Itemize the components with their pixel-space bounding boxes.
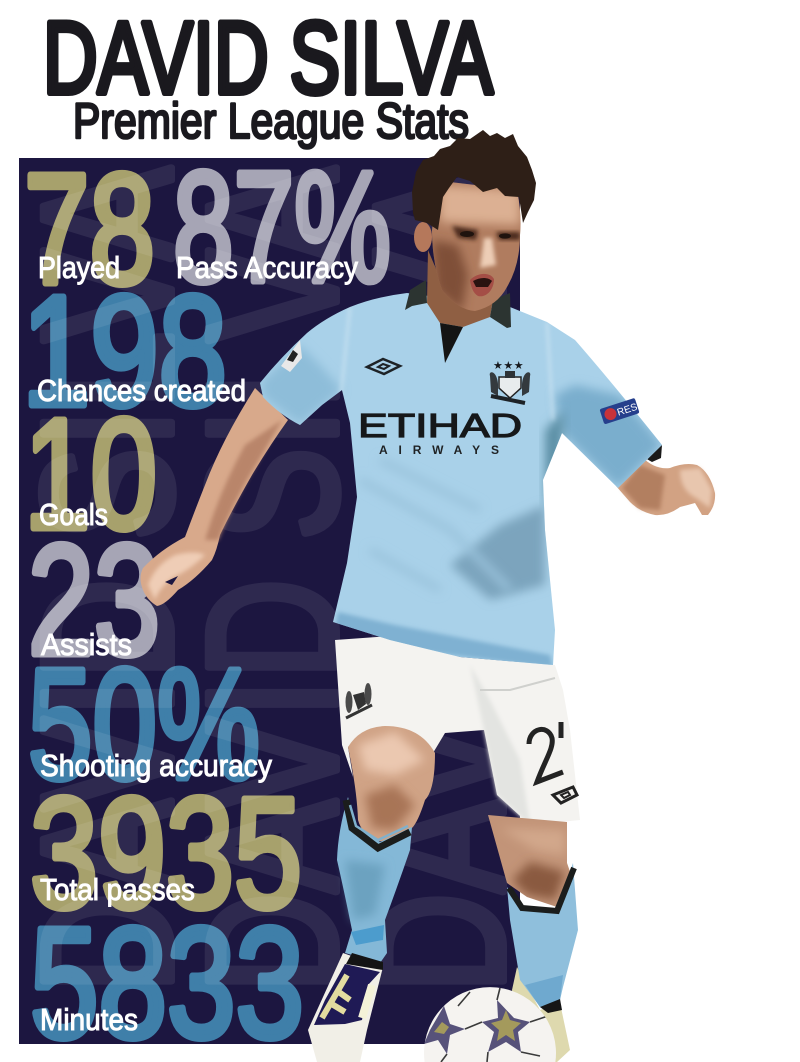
watermark: repeated name columns (38, 164, 507, 984)
player figure (140, 130, 715, 1062)
label: total passes: Total passes (40, 872, 195, 907)
icon: champions league sleeve badge (281, 340, 302, 372)
number: 78 played: 78 (24, 142, 155, 317)
number: 198 chances created: 198 (22, 264, 227, 439)
shirt: dark collar (405, 280, 511, 328)
number: 50% shooting accuracy: 50% (28, 637, 260, 812)
player: hair (412, 130, 536, 230)
label: shooting accuracy: Shooting accuracy (40, 748, 272, 783)
icon: respect sleeve badge (599, 398, 640, 424)
player: white shorts (335, 636, 580, 825)
number: 87% pass accuracy: 87% (173, 140, 391, 315)
player: left sock (337, 797, 412, 963)
icon: club crest with three stars (490, 360, 530, 403)
title: DAVID SILVA (43, 1, 493, 115)
subtitle: Premier League Stats (73, 93, 469, 149)
player: ear (414, 222, 432, 252)
panel: stats background (19, 158, 520, 1044)
player: right boot (512, 967, 570, 1062)
label: chances created: Chances created (37, 373, 246, 408)
label: assists: Assists (41, 627, 132, 662)
player: right sock (507, 863, 578, 1013)
player: left knee and thigh (348, 726, 435, 841)
icon: umbro double diamond on chest (367, 359, 400, 374)
player: right thigh (488, 815, 573, 907)
icon: umbro double diamond on shorts (553, 787, 577, 803)
shorts crest (346, 683, 372, 718)
player: right arm and hand (616, 445, 715, 515)
stat numbers (22, 140, 391, 1062)
football (424, 987, 556, 1062)
label: played: Played (38, 250, 120, 285)
label: minutes: Minutes (40, 1002, 138, 1037)
text: airways sponsor line: AIRWAYS (379, 443, 499, 457)
player: neck (427, 250, 493, 327)
stat labels (37, 250, 358, 1037)
number: 23 assists: 23 (28, 513, 160, 688)
number: 3935 total passes: 3935 (30, 766, 302, 941)
text: etihad sponsor wordmark: ETIHAD (358, 407, 522, 444)
player: light blue shirt (260, 250, 662, 668)
label: pass accuracy: Pass Accuracy (176, 250, 358, 285)
number: 10 goals: 10 (24, 387, 157, 562)
player: left arm and hand (140, 388, 288, 606)
player: face (432, 182, 521, 312)
shorts number 21 (529, 722, 563, 782)
player: left boot (308, 953, 383, 1062)
icon: club crest with three stars: ★★★ (493, 360, 524, 372)
shirt: inner black v-neck (440, 323, 463, 363)
icon: respect sleeve badge: RES (616, 402, 639, 419)
label: goals: Goals (39, 497, 108, 532)
